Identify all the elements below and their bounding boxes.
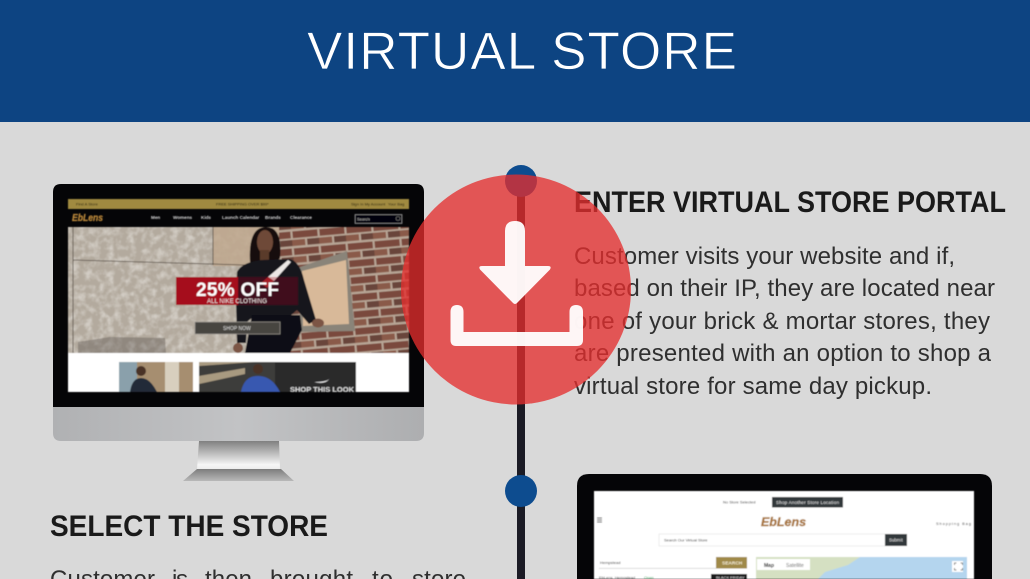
site search box: Search — [357, 216, 370, 222]
gold promo bar: Sign In My Account — [351, 202, 386, 206]
gold promo bar: FREE SHIPPING OVER $99* — [216, 202, 269, 206]
icon: download arrow — [450, 221, 583, 346]
sale banner: 25% OFF — [196, 280, 279, 301]
red circle — [401, 174, 631, 404]
description: virtual store for same day pickup. — [574, 373, 932, 400]
search bar: Search Our Virtual Store — [664, 538, 708, 542]
shop now button — [195, 322, 280, 334]
product tile 2 — [199, 362, 356, 394]
shop another store button — [772, 497, 843, 508]
monitor chin — [53, 407, 424, 441]
description: based on their IP, they are located near — [574, 275, 995, 302]
window frame — [297, 251, 355, 332]
white content strip — [68, 353, 409, 392]
description — [50, 566, 466, 579]
timeline dot 2 — [505, 475, 537, 507]
hamburger icon — [597, 518, 602, 522]
header band — [0, 0, 1030, 122]
step: enter virtual store portal — [574, 186, 1006, 400]
website screenshot — [68, 199, 409, 394]
monitor bezel — [53, 184, 424, 407]
download overlay — [401, 174, 631, 404]
heading: SELECT THE STORE — [50, 510, 328, 543]
store locator screenshot — [594, 491, 974, 579]
shop another store button: Shop Another Store Location — [776, 500, 839, 505]
site navigation: Brands — [265, 215, 281, 220]
location input: Hempstead — [600, 560, 620, 565]
site navigation: Launch Calendar — [222, 215, 259, 220]
map tabs: Map — [764, 563, 774, 569]
description: one of your brick & mortar stores, they — [574, 308, 990, 335]
product tiles — [119, 362, 356, 394]
monitor stand — [183, 441, 294, 481]
gold promo bar: Your Bag — [388, 202, 404, 206]
site logo: EbLens — [761, 515, 806, 529]
store result row — [599, 574, 747, 579]
site navigation: Clearance — [290, 215, 312, 220]
site navigation: Womens — [173, 215, 193, 220]
fullscreen button — [952, 561, 963, 572]
site navigation — [151, 215, 312, 220]
description — [574, 243, 995, 400]
location input: SEARCH — [722, 560, 743, 566]
product tile 1 — [119, 362, 193, 392]
gold promo bar — [68, 199, 409, 209]
laptop bezel — [577, 474, 992, 579]
title: VIRTUAL STORE — [307, 22, 737, 81]
timeline dot 1 — [505, 165, 537, 197]
site logo: EbLens — [72, 213, 103, 224]
timeline — [505, 165, 537, 579]
sale banner — [176, 277, 298, 305]
description: Customer visits your website and if, — [574, 243, 955, 270]
product tile 2: SHOP THIS LOOK — [290, 387, 354, 394]
icon: download tray — [450, 305, 583, 346]
site navigation: Kids — [201, 215, 211, 220]
search bar — [659, 534, 907, 546]
shop now button: SHOP NOW — [223, 326, 251, 332]
search bar: Submit — [889, 538, 903, 542]
laptop mockup — [577, 474, 992, 579]
map tabs: Satellite — [786, 563, 804, 569]
location input — [599, 557, 747, 569]
map tabs — [757, 559, 810, 570]
store map — [756, 557, 967, 579]
woman — [233, 227, 324, 353]
shopping bag link: Shopping Bag — [936, 521, 971, 526]
desktop monitor mockup — [53, 184, 424, 481]
site search box — [355, 214, 402, 224]
gold promo bar: Find A Store — [76, 202, 99, 206]
sale banner: ALL NIKE CLOTHING — [207, 298, 267, 305]
site navigation: Men — [151, 215, 160, 220]
step: select the store — [50, 510, 466, 579]
description: are presented with an option to shop a — [574, 340, 992, 367]
hero photo — [68, 227, 409, 353]
store status: No Store Selected — [723, 500, 755, 504]
